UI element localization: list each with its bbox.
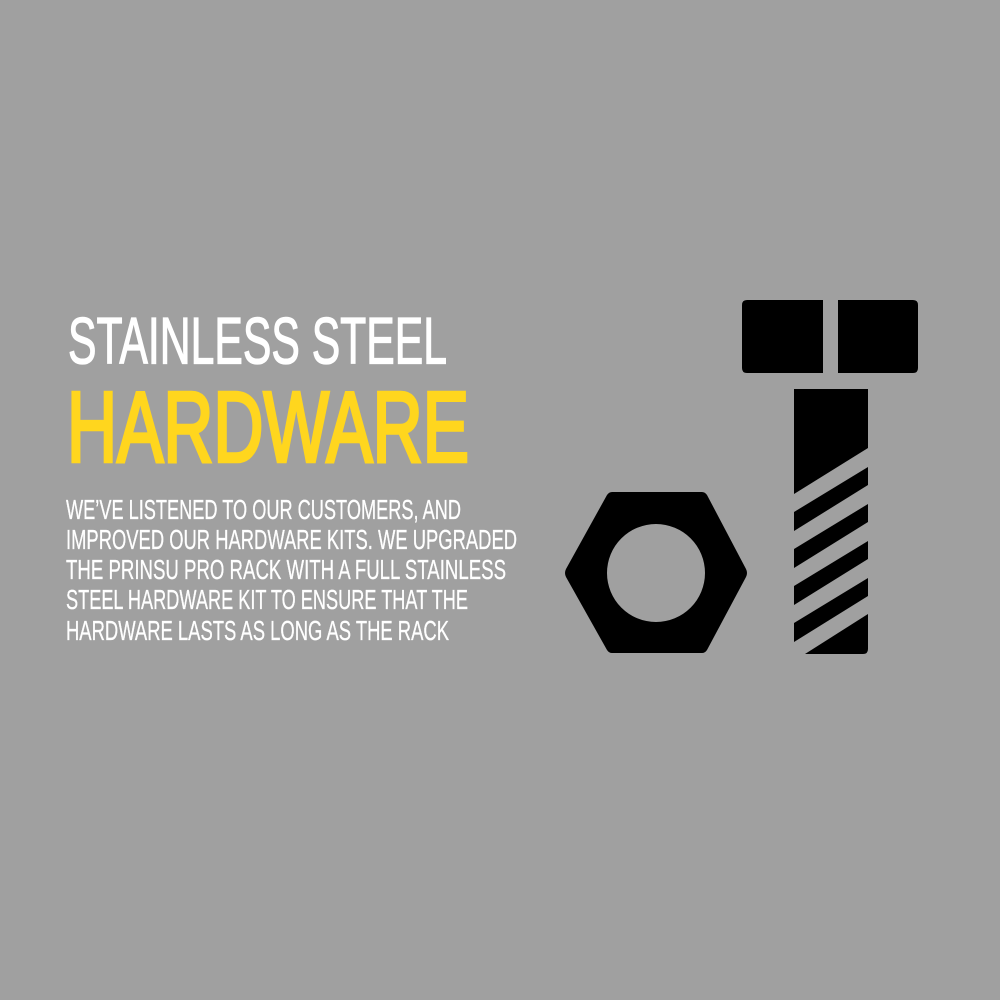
- bolt head: [742, 300, 918, 373]
- icon: hex nut: [565, 492, 747, 653]
- body text block: [66, 494, 517, 646]
- body text block: STEEL HARDWARE KIT TO ENSURE THAT THE: [66, 584, 468, 615]
- heading: hardware: HARDWARE: [67, 372, 469, 484]
- body text block: HARDWARE LASTS AS LONG AS THE RACK: [66, 615, 449, 646]
- icon: bolt: [742, 300, 918, 654]
- body text block: WE’VE LISTENED TO OUR CUSTOMERS, AND: [66, 494, 461, 525]
- body text block: THE PRINSU PRO RACK WITH A FULL STAINLESS: [66, 554, 506, 585]
- body text block: IMPROVED OUR HARDWARE KITS. WE UPGRADED: [66, 524, 517, 555]
- bolt shank and thread: [794, 389, 868, 654]
- heading: stainless steel: STAINLESS STEEL: [68, 304, 447, 378]
